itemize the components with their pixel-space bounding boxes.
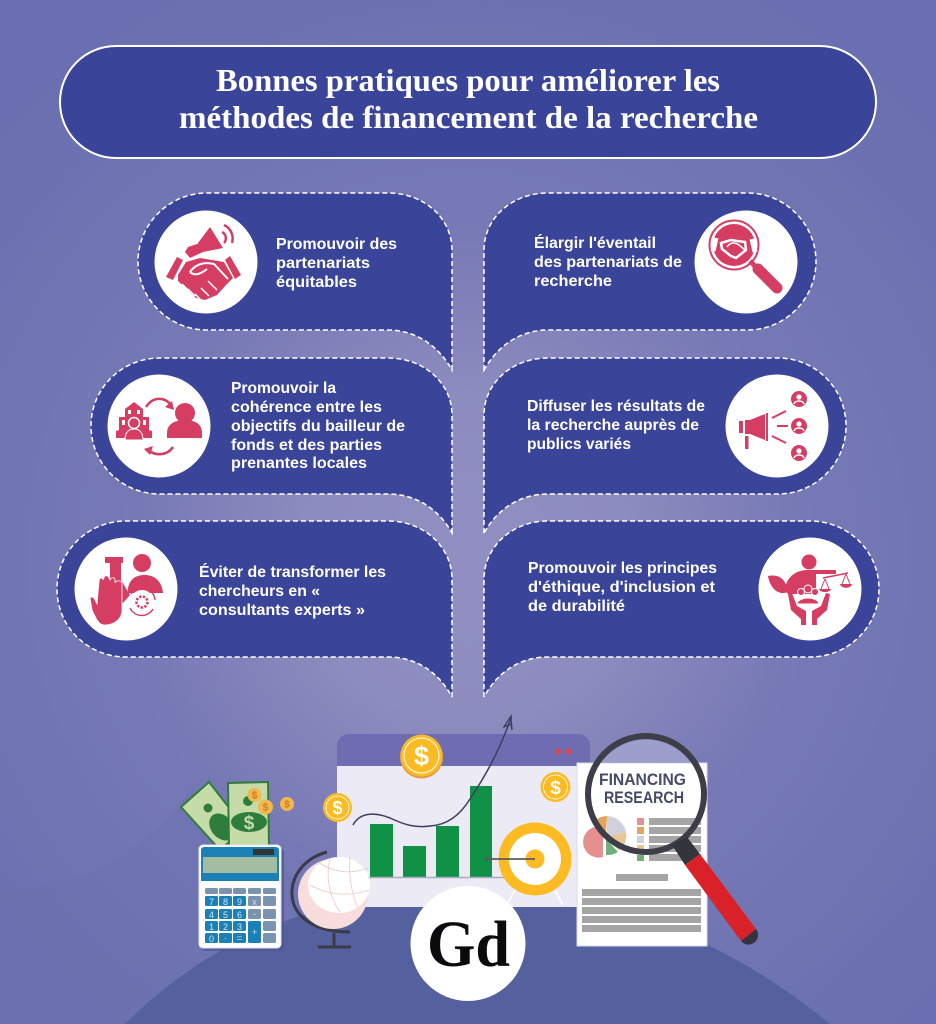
illustration: calculator: = — [237, 933, 242, 943]
pie chart — [583, 816, 626, 858]
illustration: target — [485, 822, 572, 896]
document heading: RESEARCH — [604, 788, 684, 807]
illustration: calculator: 2 — [223, 922, 228, 932]
illustration: calculator: 3 — [237, 922, 242, 932]
text: Promouvoir des — [276, 236, 397, 253]
illustration: calculator: 1 — [209, 922, 214, 932]
text: Élargir l'éventail — [534, 233, 656, 252]
text: objectifs du bailleur de — [231, 418, 405, 435]
illustration: banknotes — [181, 782, 294, 850]
illustration: banknotes: $ — [284, 800, 290, 810]
text: publics variés — [527, 436, 631, 453]
text: la recherche auprès de — [527, 417, 699, 434]
text — [199, 562, 386, 619]
text: des partenariats de — [534, 254, 682, 271]
text — [231, 380, 405, 472]
panel: éventail des partenariats — [484, 193, 816, 370]
illustration: coins — [323, 734, 570, 822]
illustration: banknotes: $ — [252, 790, 258, 802]
illustration: calculator: - — [253, 909, 256, 919]
illustration: coins: $ — [550, 778, 561, 799]
icon: megaphone to audiences — [739, 391, 807, 461]
illustration: calculator: 8 — [223, 897, 228, 907]
text: équitables — [276, 274, 357, 291]
text: consultants experts » — [199, 602, 365, 619]
text: chercheurs en « — [199, 583, 320, 600]
illustration: report document — [577, 763, 707, 946]
text: Promouvoir les principes — [528, 560, 717, 577]
title — [60, 46, 876, 158]
document heading: FINANCING — [599, 770, 686, 789]
title: méthodes de financement de la recherche — [179, 99, 758, 135]
text: Éviter de transformer les — [199, 562, 386, 581]
illustration: calculator: 5 — [223, 910, 228, 920]
icon: magnifier with handshake — [710, 220, 777, 288]
illustration: banknotes: $ — [244, 813, 255, 834]
text: d'éthique, d'inclusion et — [528, 579, 716, 596]
illustration: coins: $ — [414, 741, 429, 771]
illustration: calculator: 7 — [209, 897, 214, 907]
panel: diffusion des résultats — [484, 358, 846, 533]
icon: researcher, hand and gear — [90, 554, 163, 625]
text: recherche — [534, 273, 612, 290]
illustration: calculator: 0 — [209, 934, 214, 944]
illustration: calculator: x — [252, 897, 257, 907]
text: Promouvoir la — [231, 380, 336, 397]
legend and text lines — [582, 818, 701, 932]
text — [276, 236, 397, 291]
title: Bonnes pratiques pour améliorer les — [216, 62, 720, 98]
illustration: coins: $ — [332, 798, 343, 818]
text — [528, 560, 717, 615]
text: Diffuser les résultats de — [527, 398, 705, 415]
text: prenantes locales — [231, 455, 367, 472]
text — [527, 398, 705, 453]
illustration: magnifying glass — [588, 736, 758, 945]
illustration: calculator: · — [224, 933, 227, 943]
panel: éthique, inclusion, durabilité — [484, 521, 879, 697]
panel: partenariats équitables — [138, 193, 452, 370]
illustration: calculator: + — [252, 927, 257, 937]
text: fonds et des parties — [231, 437, 382, 454]
icon: ethics, inclusion and sustainability — [768, 554, 852, 625]
logo: Gd — [410, 886, 526, 1001]
illustration: calculator — [199, 845, 284, 951]
illustration: calculator: 6 — [237, 910, 242, 920]
logo: Gd: Gd — [427, 908, 510, 981]
icon: handshake and megaphone — [166, 225, 241, 300]
panel: consultants experts — [57, 521, 452, 697]
panel: cohérence des objectifs — [91, 358, 452, 533]
illustration: chart window — [337, 716, 590, 907]
illustration: calculator: 9 — [237, 897, 242, 907]
text: de durabilité — [528, 598, 625, 615]
illustration: globe — [292, 852, 370, 947]
illustration: calculator: 4 — [209, 910, 214, 920]
text: cohérence entre les — [231, 399, 382, 416]
document heading — [599, 770, 686, 807]
illustration: banknotes: $ — [263, 802, 269, 814]
text: partenariats — [276, 255, 370, 272]
text — [534, 233, 682, 290]
icon: institution and stakeholder exchange — [116, 399, 202, 455]
